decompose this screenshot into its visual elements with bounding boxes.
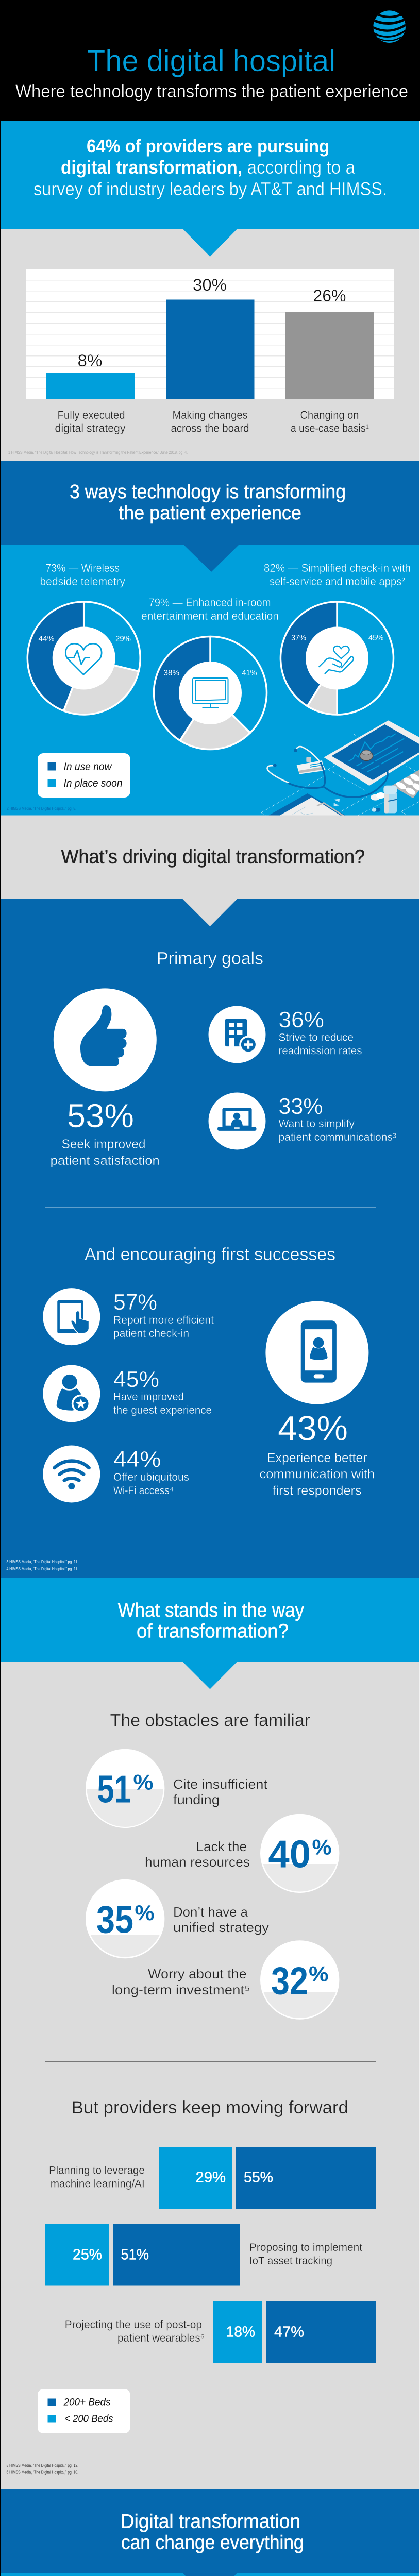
stat: 53%: patient satisfaction: [51, 1154, 160, 1168]
stat: 53%: Seek improved: [62, 1137, 145, 1151]
stat: 51%: Cite insufficient: [173, 1776, 268, 1792]
stat: 32%: long-term investment⁵: [112, 1982, 250, 1997]
stat: 32%: [112, 1940, 339, 2020]
legend: donuts: [38, 753, 130, 798]
pills: [371, 794, 380, 801]
paired bars: IoT asset tracking: 25%: [73, 2246, 102, 2263]
heading: primary goals: Primary goals: [157, 949, 263, 969]
intro text: according to a: [247, 157, 356, 178]
arrow: [182, 2573, 237, 2576]
stat: 44%: Wi-Fi access⁴: [113, 1485, 174, 1497]
stat: 45%: 45%: [113, 1367, 159, 1392]
stat: 32%: 32: [271, 1959, 308, 2002]
paired bars: IoT asset tracking: IoT asset tracking: [249, 2255, 332, 2267]
stat: 36%: [208, 1006, 362, 1063]
heading: [70, 481, 346, 524]
stat: 43%: 43%: [278, 1409, 348, 1448]
category labels: [55, 409, 369, 435]
panel: conclusion: [0, 2489, 420, 2576]
legend: donuts: In place soon: [64, 777, 123, 789]
arrow: [182, 1662, 237, 1689]
stat: 35%: Don’t have a: [173, 1904, 248, 1920]
footnote 2: 2 HIMSS Media, “The Digital Hospital,” pg. 8.: [7, 806, 76, 811]
stat: 53%: 53%: [67, 1097, 134, 1134]
stat: 40%: human resources: [145, 1854, 250, 1870]
heading: obstacles: The obstacles are familiar: [110, 1710, 310, 1730]
paired bars: machine learning: 29%: [196, 2169, 226, 2185]
stat: 57%: 57%: [113, 1290, 157, 1315]
icon: hospital: [225, 1019, 258, 1054]
footnotes 3 and 4: 4 HIMSS Media, “The Digital Hospital,” pg. 11.: [6, 1567, 78, 1571]
donut: in-room entertainment: 41%: [242, 669, 257, 677]
stat: 40%: Lack the: [196, 1839, 247, 1854]
icon: smartphone with person: [301, 1320, 337, 1383]
paired bars: wearables: 18%: [226, 2324, 255, 2340]
stat: 57%: [43, 1288, 214, 1345]
bar chart: [26, 269, 394, 399]
icon: AT&T globe logo: [372, 10, 407, 43]
category labels: across the board: [171, 421, 249, 435]
heading: 3 ways technology is transforming: [70, 481, 346, 503]
donut labels: entertainment and education: [141, 609, 279, 622]
intro text: 64% of providers are pursuing: [87, 135, 329, 157]
donut: in-room entertainment: [154, 637, 266, 749]
paired bars: machine learning: [49, 2147, 376, 2209]
stat: 51%: %: [133, 1770, 154, 1794]
title: The digital hospital: [87, 44, 335, 78]
stat: 44%: Offer ubiquitous: [113, 1471, 189, 1483]
paired bars: IoT asset tracking: Proposing to implement: [249, 2242, 362, 2253]
bottle: [384, 792, 397, 813]
heading: can change everything: [121, 2532, 304, 2553]
stat: 40%: %: [312, 1835, 332, 1859]
stat: 36%: readmission rates: [278, 1045, 362, 1057]
stat: 35%: 35: [96, 1898, 133, 1941]
donut: in-room entertainment: 38%: [164, 669, 179, 677]
chest piece: [360, 751, 373, 760]
donut: bedside telemetry: 44%: [38, 635, 55, 643]
arrow: [182, 229, 237, 257]
stat: 40%: [145, 1814, 339, 1893]
donut labels: 79% — Enhanced in-room: [148, 596, 271, 609]
donut labels: bedside telemetry: [40, 575, 125, 588]
heading: [118, 1600, 304, 1642]
heading: [121, 2511, 304, 2553]
legend: beds: < 200 Beds: [64, 2413, 113, 2425]
icon: heart pulse: [65, 643, 102, 674]
stat: 33%: [208, 1092, 396, 1150]
legend: beds: 200+ Beds: [63, 2397, 111, 2408]
footnotes 5 and 6: 5 HIMSS Media, “The Digital Hospital,” pg. 12.: [6, 2463, 78, 2468]
stat: 36%: 36%: [278, 1007, 324, 1032]
panel: survey chart: [0, 229, 420, 461]
icon: hand holding heart: [319, 646, 354, 673]
stethoscope: [267, 747, 388, 797]
heading: What’s driving digital transformation?: [61, 846, 365, 868]
illustration: medical devices: [261, 720, 420, 816]
legend: beds: [38, 2389, 130, 2433]
stat: 33%: 33%: [278, 1094, 323, 1119]
paired bars: machine learning: 55%: [244, 2169, 273, 2185]
bar chart: 26%: [313, 286, 346, 305]
stat: 33%: patient communications³: [278, 1131, 396, 1143]
donut labels: [40, 562, 411, 622]
icon: screen: [193, 678, 228, 708]
icon: wifi: [55, 1461, 89, 1488]
intro text: digital transformation,: [61, 157, 242, 178]
icon: person with star: [57, 1375, 90, 1413]
donut: simplified check-in: 37%: [291, 634, 306, 642]
arrow: [182, 899, 237, 926]
stat: 43%: first responders: [272, 1484, 362, 1498]
intro text: survey of industry leaders by AT&T and HIMSS.: [33, 178, 387, 199]
paired bars: machine learning: Planning to leverage: [49, 2165, 145, 2176]
category labels: digital strategy: [55, 421, 126, 435]
paired bars: wearables: Projecting the use of post-op: [65, 2319, 202, 2331]
donut: bedside telemetry: [27, 602, 140, 715]
panel: what's driving heading: [0, 815, 420, 899]
category labels: Making changes: [172, 409, 247, 421]
arrow: [183, 545, 239, 572]
paired bars: wearables: patient wearables⁶: [117, 2332, 205, 2344]
ID badge: [297, 760, 324, 774]
donut labels: 82% — Simplified check-in with: [264, 562, 411, 574]
heading: Digital transformation: [121, 2511, 300, 2533]
stat: 53%: [51, 988, 160, 1168]
footnotes 5 and 6: 6 HIMSS Media, “The Digital Hospital,” pg. 10.: [6, 2470, 78, 2475]
stat: 51%: [86, 1749, 268, 1828]
heading: the patient experience: [119, 502, 301, 524]
stat: 57%: Report more efficient: [113, 1314, 214, 1326]
stat: 33%: Want to simplify: [278, 1118, 355, 1130]
stat: 32%: Worry about the: [148, 1966, 247, 1981]
donut labels: self-service and mobile apps²: [270, 575, 405, 588]
clipboard: [268, 793, 346, 816]
tablet: [324, 720, 420, 786]
stat: 51%: 51: [97, 1767, 131, 1810]
stat: 44%: [43, 1446, 189, 1502]
heading: moving forward: But providers keep moving forward: [72, 2098, 348, 2117]
paired bars: wearables: 47%: [274, 2324, 304, 2340]
category labels: Fully executed: [58, 409, 125, 421]
category labels: a use-case basis¹: [291, 421, 369, 435]
stat: 57%: patient check-in: [113, 1328, 189, 1340]
stat: 43%: communication with: [260, 1467, 375, 1482]
footnotes 3 and 4: 3 HIMSS Media, “The Digital Hospital,” pg. 11.: [6, 1560, 78, 1564]
icon: thumbs up: [80, 1005, 127, 1066]
footnotes 3 and 4: [6, 1560, 78, 1571]
stat: 35%: %: [135, 1901, 155, 1925]
stat: 44%: 44%: [113, 1447, 161, 1472]
heading: of transformation?: [137, 1621, 289, 1642]
blister: [392, 769, 420, 798]
stat: 43%: Experience better: [267, 1451, 367, 1465]
icon: laptop with person: [217, 1108, 256, 1131]
stat: 36%: Strive to reduce: [278, 1031, 354, 1044]
heading: What stands in the way: [118, 1600, 304, 1621]
footnotes 5 and 6: [6, 2463, 78, 2475]
bar chart: 30%: [193, 276, 227, 294]
category labels: Changing on: [300, 409, 359, 421]
stat: 35%: [86, 1879, 269, 1958]
icon: tablet touch: [57, 1300, 89, 1333]
paired bars: IoT asset tracking: [45, 2224, 362, 2285]
capsule: [372, 808, 380, 812]
stat: 45%: the guest experience: [113, 1404, 212, 1416]
heading: first successes: And encouraging first successes: [85, 1245, 335, 1264]
panel: header: [0, 0, 420, 121]
stat: 45%: [43, 1365, 212, 1422]
paired bars: machine learning: machine learning/AI: [51, 2178, 145, 2190]
paired bars: IoT asset tracking: 51%: [121, 2246, 149, 2263]
footnote 1: 1 HIMSS Media, “The Digital Hospital: How Technology is Transforming the Patient Experience,” June 2018, pg. 4.: [8, 450, 188, 455]
donut: simplified check-in: [280, 602, 393, 715]
stat: 40%: 40: [268, 1832, 311, 1875]
stat: 35%: unified strategy: [173, 1920, 269, 1935]
donut: bedside telemetry: 29%: [115, 635, 131, 643]
stat: 43%: [260, 1301, 375, 1498]
stat: 51%: funding: [173, 1792, 220, 1807]
stat: 32%: %: [309, 1962, 329, 1986]
paired bars: wearables: [65, 2301, 376, 2363]
panel: obstacles: [0, 1662, 420, 2489]
panel: obstacles heading: [0, 1578, 420, 1662]
intro text: [33, 135, 387, 199]
bar chart: 8%: [77, 351, 102, 370]
stat: 45%: Have improved: [113, 1391, 184, 1403]
donut: simplified check-in: 45%: [368, 634, 384, 642]
donut labels: 73% — Wireless: [45, 562, 120, 574]
panel: drivers: [0, 899, 420, 1578]
panel: 3 ways: [0, 461, 420, 816]
legend: donuts: In use now: [64, 761, 112, 773]
panel: survey intro: [0, 121, 420, 257]
